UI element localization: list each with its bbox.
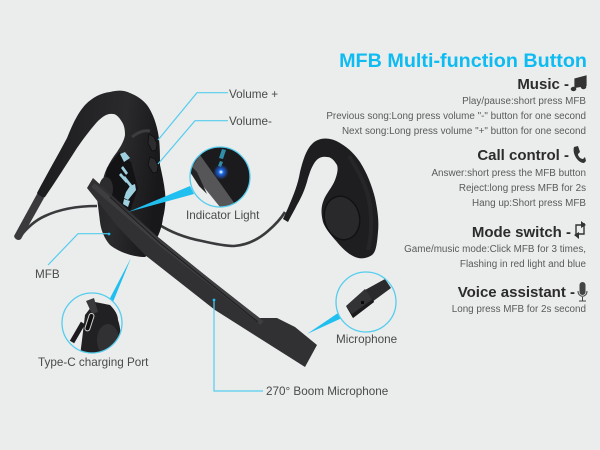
section: Mode switch: Flashing in red light and blue xyxy=(460,259,587,270)
section: Voice assistant xyxy=(452,282,587,315)
icon: microphone xyxy=(580,282,586,295)
section: Music: Next song:Long press volume "+" button for one second xyxy=(342,126,586,137)
left ear hook and control module xyxy=(14,91,165,257)
callout: indicator light xyxy=(128,146,251,212)
section: Mode switch xyxy=(404,221,587,270)
hook sleeve tip xyxy=(14,194,44,240)
headset illustration xyxy=(14,91,378,367)
side panel with teal grille xyxy=(99,152,138,214)
boom microphone arm xyxy=(87,178,317,367)
label: MFB: MFB xyxy=(35,268,60,281)
section: Call control xyxy=(431,146,586,209)
label: Volume-: Volume- xyxy=(229,115,272,128)
volume buttons xyxy=(132,131,158,173)
callout: Type-C charging port xyxy=(62,258,131,356)
label: Type-C charging Port: Type-C charging Port xyxy=(38,356,149,369)
label: Microphone: Microphone xyxy=(336,333,397,346)
title: MFB Multi-function Button xyxy=(339,50,587,72)
section: Mode switch: Game/music mode:Click MFB for 3 times, xyxy=(404,244,586,255)
label: 270 degree Boom Microphone: 270° Boom Microphone xyxy=(266,385,388,398)
section: Mode switch: Mode switch - xyxy=(472,224,571,241)
section: Call control: Answer:short press the MFB button xyxy=(431,168,586,179)
connecting wire xyxy=(19,206,285,246)
section: Music: Play/pause:short press MFB xyxy=(462,96,586,107)
section: Call control: Call control - xyxy=(477,147,569,164)
label: Volume +: Volume + xyxy=(229,88,278,101)
section: Voice assistant: Voice assistant - xyxy=(458,284,575,301)
section: Music xyxy=(326,76,586,137)
label: Indicator Light: Indicator Light xyxy=(186,209,260,222)
icon: mode switch arrows xyxy=(576,223,584,236)
icon: music note xyxy=(575,76,586,88)
leader lines xyxy=(48,93,263,391)
right ear pod xyxy=(283,139,378,258)
icon: phone xyxy=(574,146,586,163)
section: Call control: Reject:long press MFB for 2s xyxy=(459,183,586,194)
section: Voice assistant: Long press MFB for 2s second xyxy=(452,304,586,315)
section: Call control: Hang up:Short press MFB xyxy=(472,198,586,209)
callout: microphone close-up xyxy=(307,272,396,334)
section: Music: Music - xyxy=(517,76,569,93)
section: Music: Previous song:Long press volume "-" button for one second xyxy=(326,111,586,122)
